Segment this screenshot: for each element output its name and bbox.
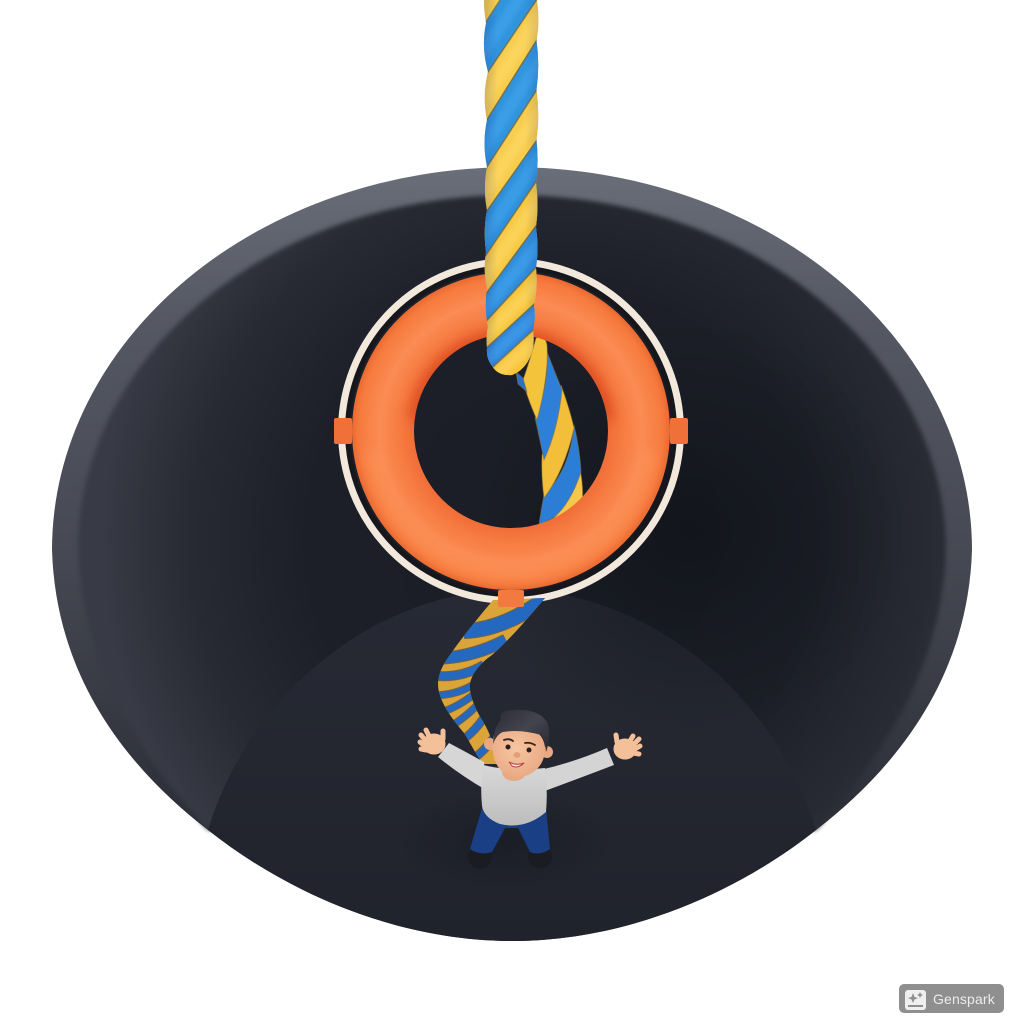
watermark: Genspark	[899, 984, 1004, 1013]
trousers	[470, 808, 550, 853]
right shoe	[528, 844, 552, 868]
orange torus	[383, 303, 639, 559]
left clip	[334, 418, 352, 444]
eyes	[506, 744, 510, 750]
torso	[481, 765, 547, 826]
rope: back strand through the ring	[516, 337, 583, 525]
blue highlights	[484, 0, 538, 365]
right hand	[614, 735, 640, 759]
life ring	[334, 262, 688, 600]
right arm	[540, 748, 614, 792]
torus shading	[372, 337, 650, 573]
person	[420, 710, 640, 868]
rope stripes	[484, 0, 538, 376]
watermark badge	[899, 984, 1004, 1013]
yellow highlights	[484, 12, 538, 375]
left hand	[420, 730, 445, 754]
right clip	[670, 418, 688, 444]
pit floor	[208, 590, 816, 941]
left shoe	[468, 844, 492, 868]
left arm	[438, 743, 486, 790]
shadow beside ring	[470, 320, 910, 740]
nose	[514, 752, 520, 758]
pit: circular hole	[52, 167, 972, 941]
watermark text: Genspark	[933, 991, 996, 1007]
rope: main strand from above	[484, 0, 538, 376]
hair	[493, 710, 549, 752]
ears	[484, 738, 496, 750]
head	[492, 726, 545, 777]
eyebrows	[504, 739, 535, 745]
bottom clip	[498, 590, 524, 607]
watermark icon	[905, 990, 926, 1010]
shadow at the person's feet	[395, 790, 615, 890]
pit interior wall	[78, 195, 946, 830]
mouth	[509, 762, 524, 767]
neck	[502, 763, 526, 781]
rope: lower strand	[438, 598, 545, 764]
rope shading	[484, 0, 538, 369]
pit rim	[52, 167, 972, 941]
ring hoop	[347, 267, 675, 595]
